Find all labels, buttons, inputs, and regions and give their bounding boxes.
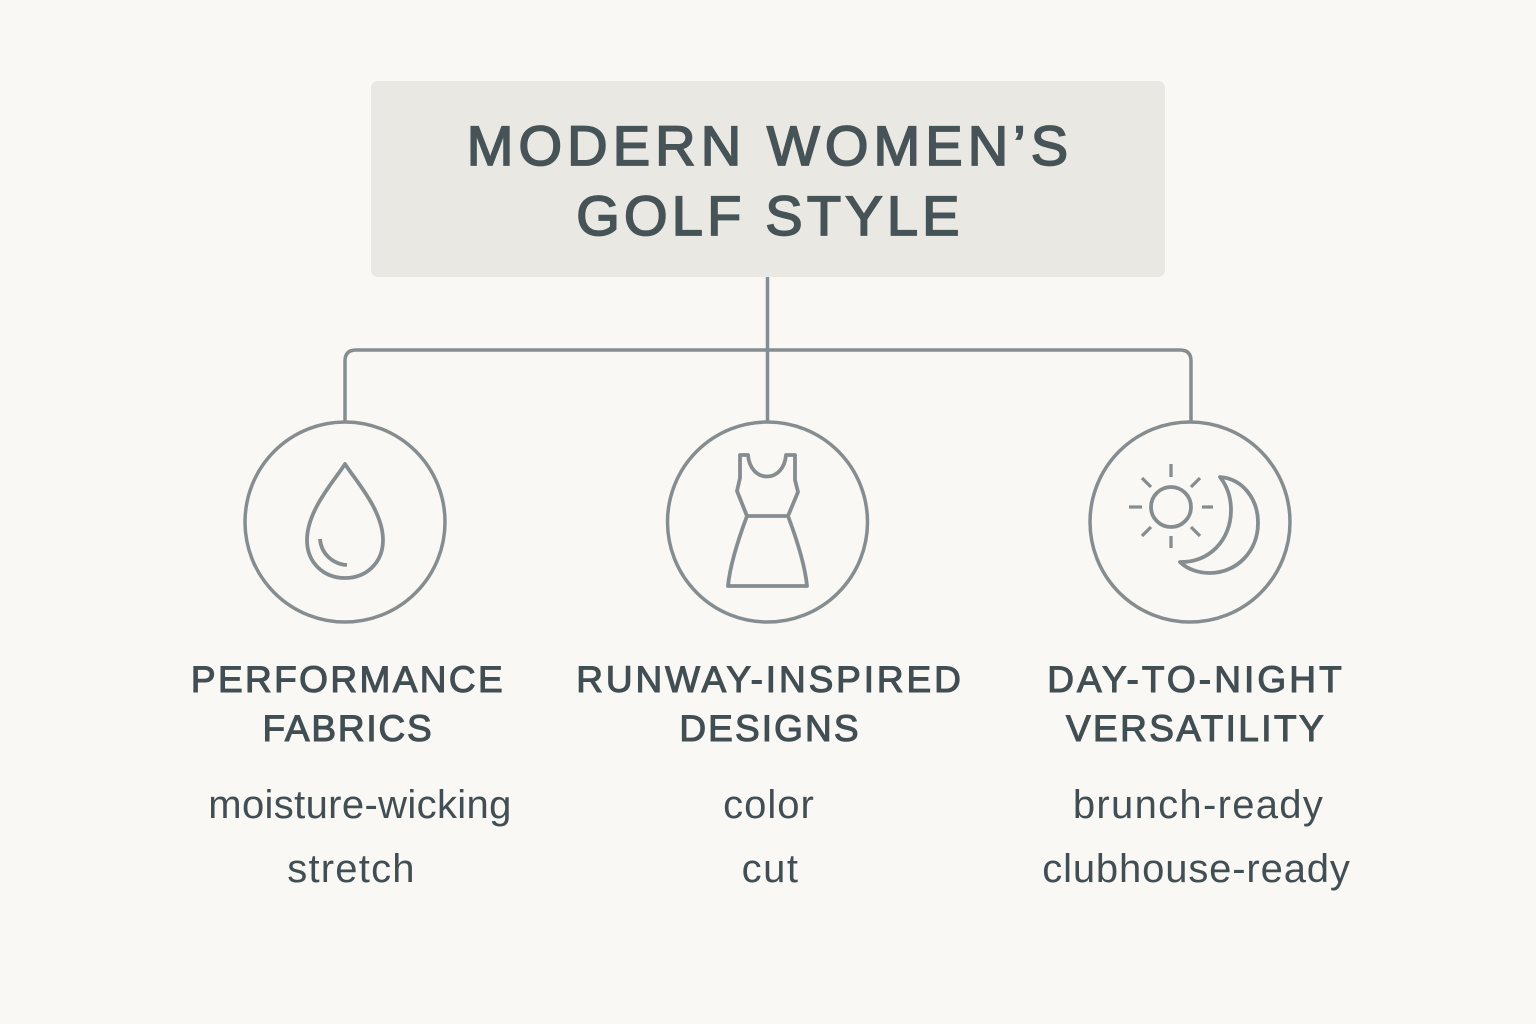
icon: sun and moon (1129, 464, 1258, 573)
text: cut: cut (742, 847, 799, 891)
heading: performance fabrics (191, 659, 505, 749)
text: stretch: stretch (287, 847, 416, 891)
heading: day-to-night versatility (1047, 659, 1345, 749)
text: moisture-wicking: moisture-wicking (208, 783, 512, 827)
text: color: color (723, 783, 815, 827)
circle: performance fabrics (245, 422, 445, 622)
heading: day-to-night versatility: VERSATILITY (1066, 708, 1326, 749)
title: GOLF STYLE (576, 184, 964, 247)
title: MODERN WOMEN’S (467, 114, 1073, 177)
text: brunch-ready: brunch-ready (1073, 783, 1324, 827)
heading: performance fabrics: PERFORMANCE (191, 659, 505, 700)
connector lines (345, 277, 1191, 422)
icon: water drop (307, 464, 383, 578)
heading: day-to-night versatility: DAY-TO-NIGHT (1047, 659, 1345, 700)
icon: dress (728, 455, 807, 586)
heading: runway-inspired designs (576, 659, 964, 749)
circle: versatility (1090, 422, 1290, 622)
heading: runway-inspired designs: DESIGNS (679, 708, 861, 749)
title box (371, 81, 1165, 277)
heading: runway-inspired designs: RUNWAY-INSPIRED (576, 659, 964, 700)
text: clubhouse-ready: clubhouse-ready (1042, 847, 1351, 891)
circle: runway designs (668, 422, 868, 622)
heading: performance fabrics: FABRICS (263, 708, 433, 749)
title (467, 114, 1073, 247)
